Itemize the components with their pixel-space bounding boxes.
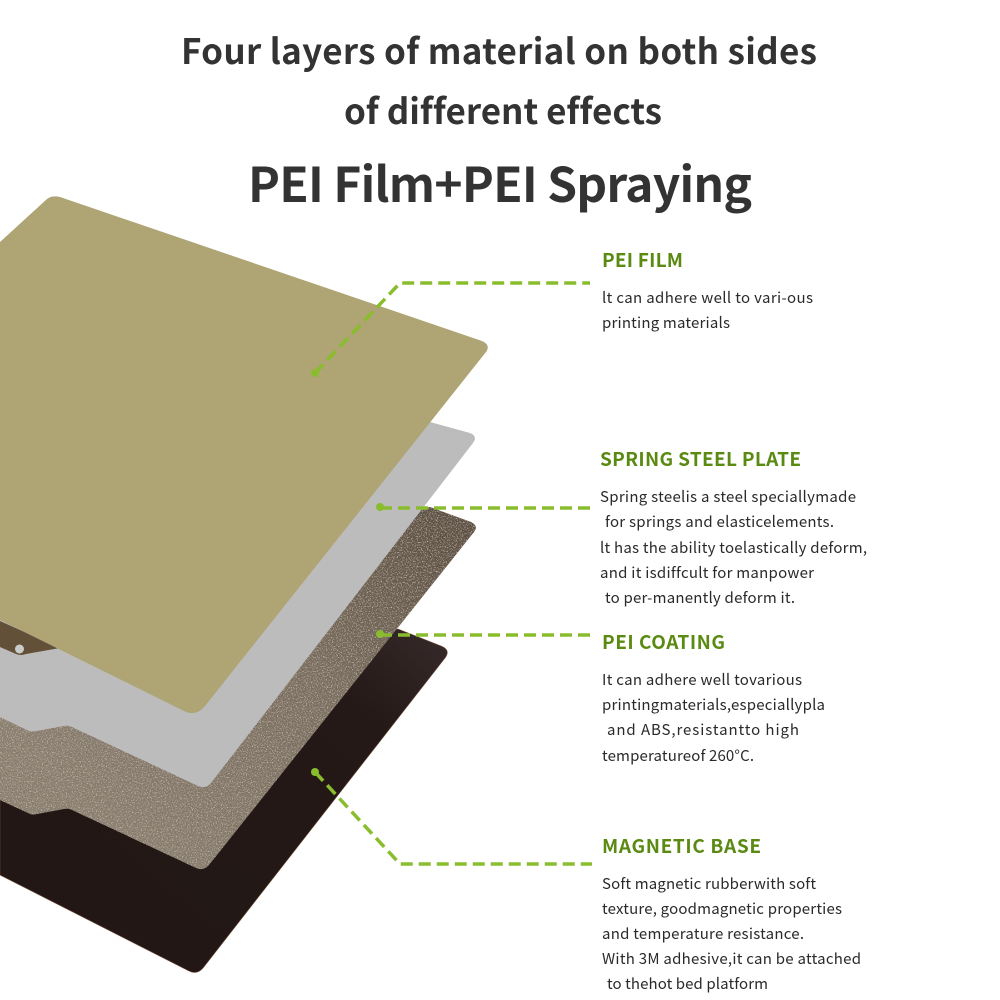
callout: magnetic base (602, 832, 861, 994)
callout: spring steel plate: SPRING STEEL PLATE (600, 445, 801, 472)
callout: PEI coating: temperatureof 260°C. (602, 745, 754, 766)
layer: PEI coating (0, 507, 476, 869)
callout: PEI film: lt can adhere well to vari-ous (602, 287, 813, 308)
leader line: spring steel plate (376, 503, 590, 511)
callout: spring steel plate: for springs and elasticelements. (605, 511, 834, 532)
callout: PEI coating: It can adhere well tovarious (602, 669, 802, 690)
callout: magnetic base: With 3M adhesive,it can be attached (602, 948, 861, 969)
layer: spring steel plate (0, 422, 475, 787)
layered plate stack (0, 196, 488, 972)
callout: PEI film (602, 246, 813, 333)
callout: magnetic base: Soft magnetic rubberwith soft (602, 873, 816, 894)
callout: PEI coating: printingmaterials,especiallypla (602, 694, 825, 715)
callout: magnetic base: texture, goodmagnetic properties (602, 898, 842, 919)
title (181, 24, 817, 135)
leader line: PEI coating (376, 630, 590, 638)
subtitle: PEI Film+PEI Spraying (248, 146, 752, 216)
layer: PEI film (0, 196, 488, 713)
title: of different effects (344, 84, 662, 135)
callout: PEI coating: and ABS,resistantto high (607, 719, 799, 740)
callout: magnetic base: MAGNETIC BASE (602, 832, 761, 859)
callout: spring steel plate: lt has the ability toelastically deform, (600, 537, 867, 558)
callout: spring steel plate: and it isdiffcult for manpower (600, 562, 814, 583)
layer: brown tab with hole (0, 621, 60, 655)
callout: magnetic base: and temperature resistance. (602, 923, 804, 944)
callout: PEI film: PEI FILM (602, 246, 683, 273)
leader line: magnetic base (311, 768, 592, 864)
callout: spring steel plate: to per-manently deform it. (605, 587, 795, 608)
leader line: PEI film (311, 283, 590, 377)
callout: PEI coating: PEI COATING (602, 628, 725, 655)
title: Four layers of material on both sides (181, 24, 817, 75)
callout: PEI coating (602, 628, 825, 766)
callout: PEI film: printing materials (602, 312, 730, 333)
callout: magnetic base: to thehot bed platform (607, 973, 768, 994)
callout: spring steel plate (600, 445, 867, 608)
callout: spring steel plate: Spring steelis a steel speciallymade (600, 486, 856, 507)
layer: magnetic base (0, 629, 447, 972)
